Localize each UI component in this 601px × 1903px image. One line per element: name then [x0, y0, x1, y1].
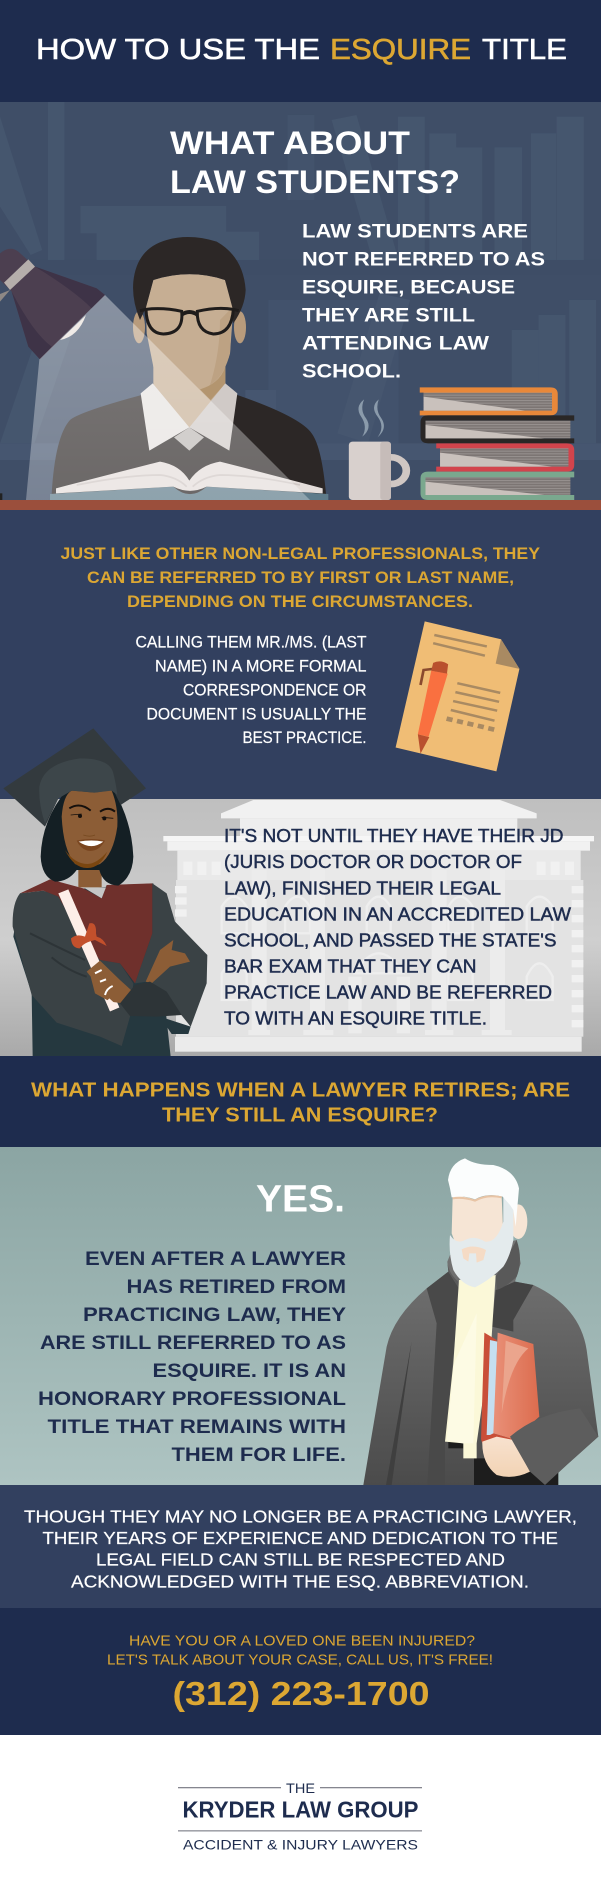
title: TITLE [482, 34, 567, 66]
call to action text: HAVE YOU OR A LOVED ONE BEEN INJURED? [129, 1632, 475, 1649]
text block: JD requirement: IT'S NOT UNTIL THEY HAVE THEIR JD [224, 825, 564, 846]
heading: what about law students: WHAT ABOUT [170, 125, 411, 161]
text block: law students explanation [302, 220, 545, 382]
icon: retired lawyer [363, 1158, 598, 1485]
text block: JD requirement: TO WITH AN ESQUIRE TITLE. [224, 1008, 487, 1029]
text block: law students explanation: THEY ARE STILL [302, 304, 475, 326]
icon: stack of books [420, 387, 574, 500]
gold statement: DEPENDING ON THE CIRCUMSTANCES. [127, 592, 473, 611]
text block: experience and dedication: THOUGH THEY MAY NO LONGER BE A PRACTICING LAWYER, [24, 1506, 577, 1526]
text block: experience and dedication [24, 1506, 577, 1591]
icon: coffee mug [349, 399, 406, 500]
text block: honorary title [38, 1248, 346, 1466]
heading: what about law students [170, 125, 460, 200]
gold statement: JUST LIKE OTHER NON-LEGAL PROFESSIONALS, THEY [60, 544, 541, 563]
phone number: (312) 223-1700 [172, 1675, 430, 1712]
header band [0, 0, 601, 102]
icon: student reading [50, 237, 328, 500]
text block: law students explanation: ATTENDING LAW [302, 332, 490, 354]
text block: honorary title: EVEN AFTER A LAWYER [85, 1248, 346, 1270]
text block: law students explanation: ESQUIRE, BECAUSE [302, 276, 515, 298]
footer logo: KRYDER LAW GROUP [182, 1797, 418, 1823]
text block: JD requirement [224, 825, 572, 1029]
panel: law students [0, 102, 601, 510]
text block: formal correspondence: NAME) IN A MORE FORMAL [155, 657, 366, 675]
text block: honorary title: ARE STILL REFERRED TO AS [40, 1332, 346, 1354]
text block: formal correspondence [136, 634, 367, 747]
panel: respected and acknowledged [0, 1485, 601, 1608]
text block: honorary title: HAS RETIRED FROM [126, 1276, 346, 1298]
text block: experience and dedication: ACKNOWLEDGED WITH THE ESQ. ABBREVIATION. [71, 1571, 529, 1591]
courthouse building [163, 800, 594, 1052]
icon: desk lamp [0, 249, 310, 500]
footer logo: THE [286, 1780, 315, 1796]
text block: JD requirement: SCHOOL, AND PASSED THE STATE'S [224, 929, 556, 950]
text block: formal correspondence: CORRESPONDENCE OR [183, 681, 367, 699]
call to action text: LET'S TALK ABOUT YOUR CASE, CALL US, IT'S FREE! [107, 1651, 493, 1668]
text block: formal correspondence: BEST PRACTICE. [242, 729, 366, 747]
text block: law students explanation: NOT REFERRED TO AS [302, 248, 545, 270]
text block: honorary title: PRACTICING LAW, THEY [83, 1304, 346, 1326]
panel: non-legal professionals [0, 510, 601, 799]
heading: retirement question [31, 1080, 570, 1126]
text block: honorary title: TITLE THAT REMAINS WITH [48, 1416, 346, 1438]
text block: experience and dedication: LEGAL FIELD CAN STILL BE RESPECTED AND [96, 1549, 505, 1569]
title: ESQUIRE [330, 34, 471, 66]
call to action text [107, 1632, 493, 1668]
heading: yes: YES. [256, 1179, 345, 1221]
icon: graduate with diploma [3, 728, 207, 1057]
text block: JD requirement: PRACTICE LAW AND BE REFERRED [224, 982, 552, 1003]
panel: yes, retired lawyer [0, 1147, 601, 1485]
text block: JD requirement: (JURIS DOCTOR OR DOCTOR OF [224, 851, 522, 872]
icon: document and pen [396, 621, 519, 771]
panel: retirement question [0, 1056, 601, 1147]
gold statement [60, 544, 541, 611]
text block: law students explanation: LAW STUDENTS ARE [302, 220, 528, 242]
panel: call to action [0, 1608, 601, 1735]
heading: retirement question: THEY STILL AN ESQUIRE? [162, 1104, 438, 1126]
text block: honorary title: ESQUIRE. IT IS AN [152, 1360, 346, 1382]
heading: what about law students: LAW STUDENTS? [170, 164, 460, 200]
title [36, 34, 567, 66]
text block: law students explanation: SCHOOL. [302, 360, 401, 382]
footer logo [0, 1735, 601, 1903]
text block: JD requirement: EDUCATION IN AN ACCREDITED LAW [224, 903, 572, 924]
text block: JD requirement: LAW), FINISHED THEIR LEGAL [224, 877, 501, 898]
heading: retirement question: WHAT HAPPENS WHEN A LAWYER RETIRES; ARE [31, 1080, 570, 1102]
desk shelf [0, 500, 601, 510]
text block: formal correspondence: CALLING THEM MR./MS. (LAST [136, 634, 366, 652]
title: HOW TO USE THE [36, 34, 320, 66]
text block: JD requirement: BAR EXAM THAT THEY CAN [224, 956, 476, 976]
bookshelf background [0, 102, 601, 460]
gold statement: CAN BE REFERRED TO BY FIRST OR LAST NAME, [87, 568, 514, 587]
panel: JD requirement [0, 728, 601, 1057]
footer logo: ACCIDENT & INJURY LAWYERS [183, 1836, 418, 1852]
text block: experience and dedication: THEIR YEARS OF EXPERIENCE AND DEDICATION TO THE [42, 1528, 558, 1548]
text block: honorary title: HONORARY PROFESSIONAL [38, 1388, 346, 1410]
text block: honorary title: THEM FOR LIFE. [172, 1444, 346, 1466]
text block: formal correspondence: DOCUMENT IS USUALLY THE [146, 705, 366, 723]
